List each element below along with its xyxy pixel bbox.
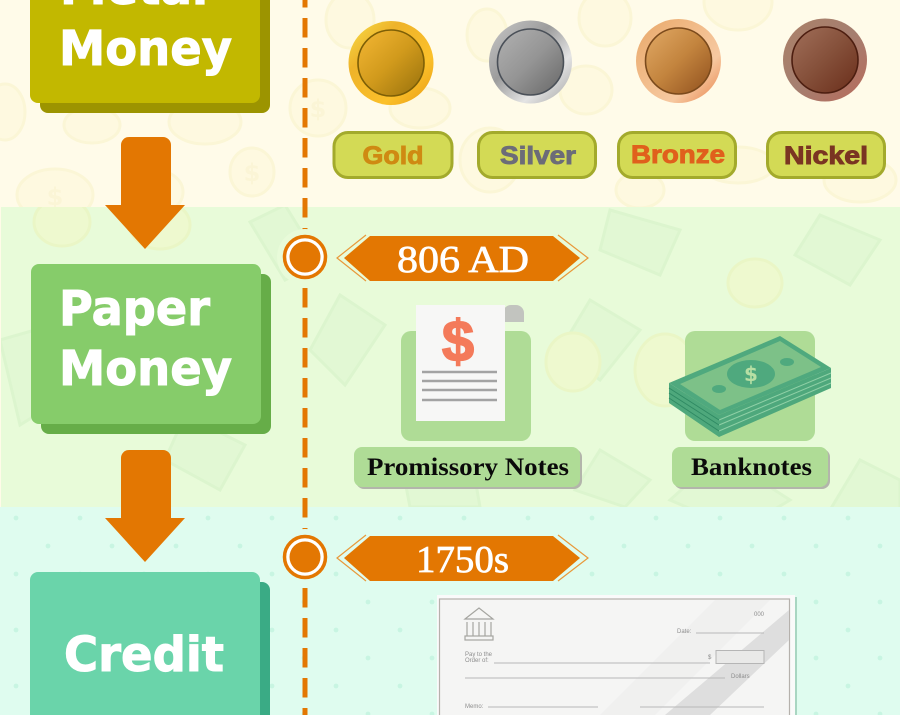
label: gold: Gold — [362, 142, 424, 170]
date ribbon: 806 AD — [337, 235, 588, 281]
icon: banknotes: $ — [744, 362, 758, 386]
box: paper money: Money — [59, 341, 232, 397]
label: promissory notes — [354, 447, 582, 489]
panel: paper money background — [0, 198, 900, 530]
cheque: 000 — [754, 612, 765, 618]
cheque: Order of: — [465, 658, 489, 664]
box: credit: Credit — [64, 627, 224, 683]
coin: silver — [489, 20, 572, 104]
panel: metal money background: $ — [244, 159, 260, 187]
label: silver: Silver — [500, 142, 576, 170]
panel: metal money background: $ — [310, 95, 326, 123]
label: banknotes: Banknotes — [691, 454, 812, 481]
date ribbon: 806 AD: 806 AD — [397, 239, 529, 281]
label: bronze — [618, 132, 736, 178]
arrow: paper to credit — [105, 450, 185, 562]
cheque: Memo: — [465, 704, 484, 710]
icon: banknotes — [669, 331, 831, 441]
arrow: metal to paper — [105, 137, 185, 249]
coin: gold — [348, 21, 434, 105]
timeline: dashed line — [302, 0, 308, 715]
icon: promissory note — [401, 305, 531, 441]
label: bronze: Bronze — [631, 141, 725, 169]
cheque: Dollars — [731, 674, 750, 680]
label: nickel — [768, 132, 884, 178]
label: gold — [334, 132, 452, 178]
box: credit — [30, 572, 270, 715]
date ribbon: 1750s: 1750s — [416, 539, 509, 581]
box: paper money: Paper — [59, 281, 210, 337]
panel: credit background — [0, 507, 900, 715]
coin: bronze — [636, 19, 721, 103]
icon: promissory note: $ — [442, 309, 474, 374]
label: promissory notes: Promissory Notes — [367, 454, 569, 481]
label: banknotes — [672, 447, 830, 489]
label: nickel: Nickel — [784, 142, 868, 170]
label: silver — [478, 132, 596, 178]
box: metal money: Money — [59, 21, 232, 77]
cheque: $ — [708, 655, 712, 661]
box: paper money — [31, 264, 271, 434]
box: metal money — [30, 0, 270, 113]
panel: metal money background — [0, 0, 900, 221]
icon: bank — [465, 608, 493, 640]
timeline marker: 806 AD — [277, 229, 333, 285]
cheque: Date: — [677, 629, 692, 635]
timeline marker: 1750s — [277, 529, 333, 585]
cheque — [437, 595, 797, 715]
cheque: Pay to the — [465, 652, 493, 658]
date ribbon: 1750s — [337, 535, 588, 581]
panel: metal money background: $ — [47, 183, 63, 211]
coin: nickel — [783, 18, 867, 102]
